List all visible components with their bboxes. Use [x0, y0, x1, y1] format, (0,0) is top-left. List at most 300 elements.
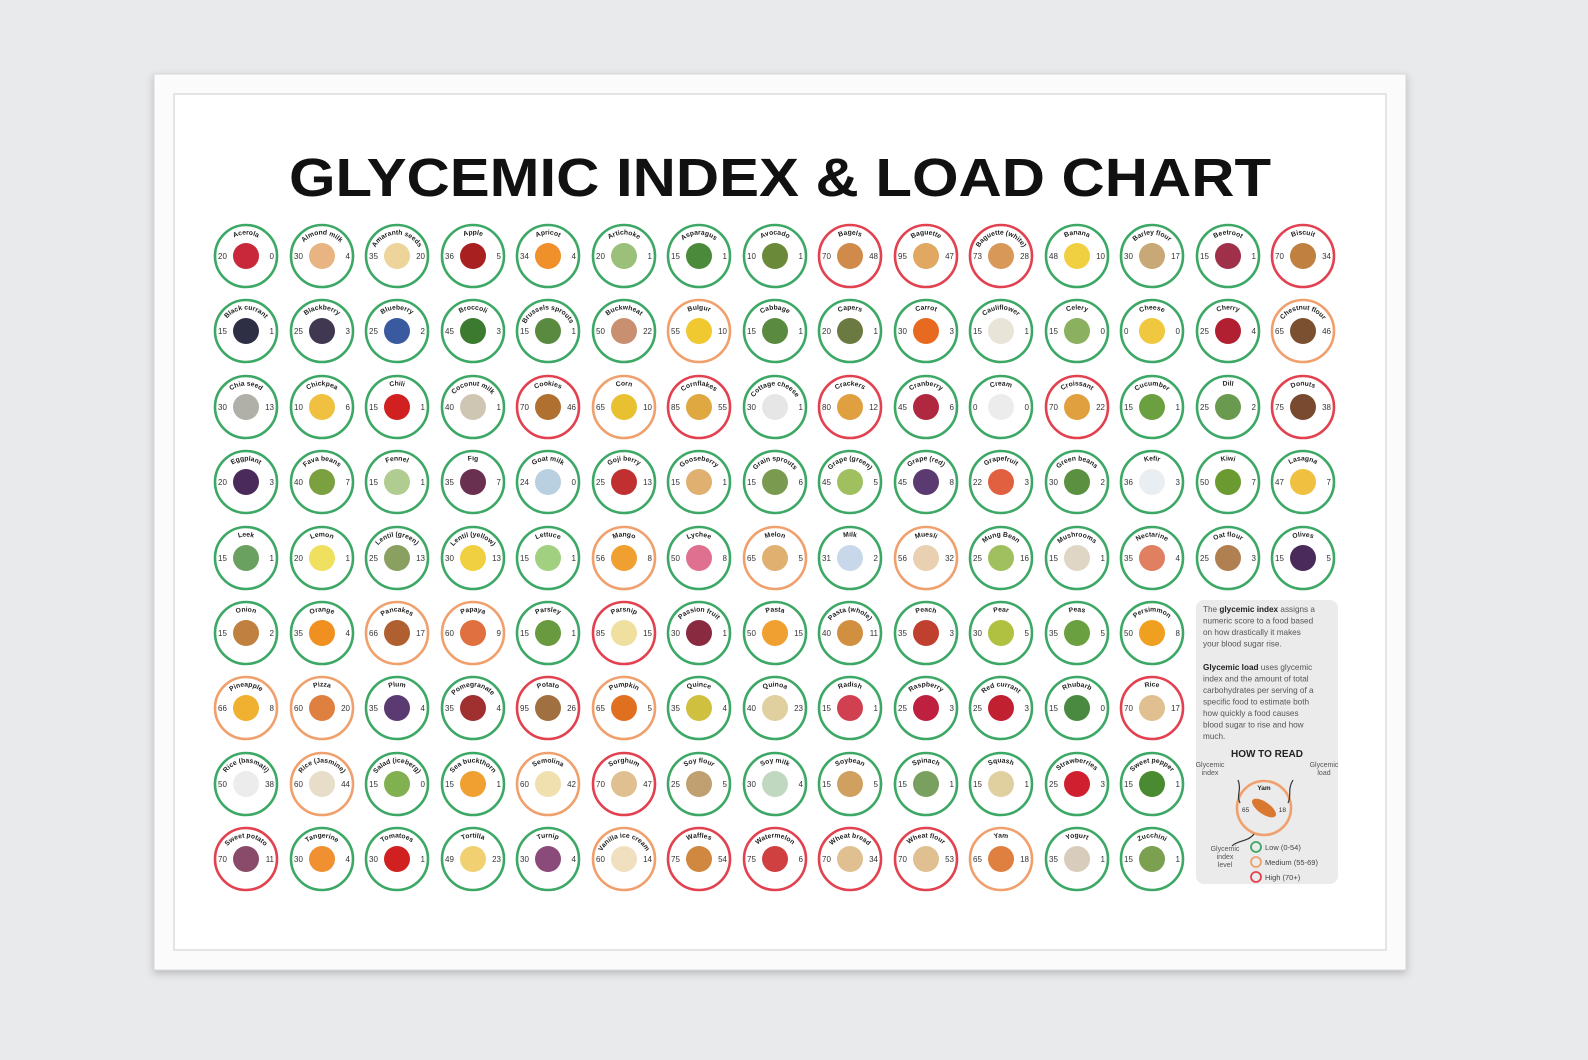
- item: Watermelon: [744, 828, 806, 890]
- item: Peach: [895, 602, 957, 664]
- item: Pumpkin: Pumpkin: [608, 681, 640, 692]
- item: Grapefruit: Grapefruit: [983, 455, 1020, 468]
- item: Chickpea: 6: [346, 403, 351, 412]
- item: Pancakes: [366, 602, 428, 664]
- item: Brussels sprouts: 1: [572, 327, 577, 336]
- item: Papaya: 9: [497, 629, 502, 638]
- item: Turnip: Turnip: [536, 832, 560, 841]
- item: Chia seed: 13: [265, 403, 275, 412]
- item: Amaranth seeds: [364, 224, 430, 288]
- item: Vanilla ice cream: 14: [643, 855, 653, 864]
- item: Biscuit: 70: [1275, 252, 1284, 261]
- item: Corn: 10: [643, 403, 653, 412]
- item: Squash: [970, 753, 1032, 815]
- item: Onion: 15: [218, 629, 227, 638]
- item: Pumpkin: 5: [648, 704, 653, 713]
- item: Mango: [593, 527, 655, 589]
- item: Fennel: 1: [421, 478, 426, 487]
- item: Cranberry: 6: [950, 403, 955, 412]
- item: Cherry: Cherry: [1216, 305, 1240, 312]
- item: Pumpkin: 65: [596, 704, 605, 713]
- item: Banana: Banana: [1064, 230, 1090, 238]
- item: Goat milk: [517, 451, 579, 513]
- item: Amaranth seeds: 35: [369, 252, 378, 261]
- item: Goji berry: Goji berry: [606, 455, 642, 467]
- item: Goji berry: 13: [643, 478, 653, 487]
- item: Cranberry: Cranberry: [909, 380, 943, 390]
- item: Cornflakes: Cornflakes: [681, 380, 717, 391]
- item: Pumpkin: [593, 677, 655, 739]
- item: Quinoa: Quinoa: [762, 681, 789, 691]
- item: Milk: 2: [874, 554, 879, 563]
- item: Barley flour: 30: [1124, 252, 1133, 261]
- item: Turnip: 4: [572, 855, 577, 864]
- item: Wheat flour: 70: [898, 855, 907, 864]
- item: Amaranth seeds: 20: [416, 252, 426, 261]
- item: Rice: [1121, 677, 1183, 739]
- item: Yogurt: 35: [1049, 855, 1058, 864]
- item: Chestnut flour: Chestnut flour: [1280, 306, 1326, 319]
- item: Lasagna: Lasagna: [1288, 455, 1319, 466]
- item: Passion fruit: 1: [723, 629, 728, 638]
- item: Raspberry: 25: [898, 704, 907, 713]
- item: Persimmon: Persimmon: [1132, 606, 1172, 620]
- item: Lychee: Lychee: [686, 531, 712, 541]
- item: Goji berry: 25: [596, 478, 605, 487]
- item: Black currant: 15: [218, 327, 227, 336]
- item: Parsnip: [593, 602, 655, 664]
- item: Tangerine: 30: [294, 855, 303, 864]
- item: Donuts: 38: [1322, 403, 1332, 412]
- item: Sweet pepper: 1: [1176, 780, 1181, 789]
- item: Asparagus: [666, 224, 732, 288]
- item: Apricot: Apricot: [536, 230, 561, 238]
- item: Cottage cheese: [742, 374, 808, 440]
- item: Acerola: Acerola: [234, 230, 259, 238]
- item: Quinoa: [744, 677, 806, 739]
- item: Croissant: [1046, 376, 1108, 438]
- item: Sea buckthorn: 15: [445, 780, 454, 789]
- item: Crackers: 80: [822, 403, 831, 412]
- item: Pizza: Pizza: [312, 681, 332, 690]
- item: Waffles: 54: [718, 855, 728, 864]
- item: Grapefruit: 22: [973, 478, 982, 487]
- item: Bulgur: 10: [718, 327, 728, 336]
- item: Cookies: [516, 374, 580, 440]
- item: Milk: 31: [822, 554, 831, 563]
- item: Carrot: 30: [898, 327, 907, 336]
- item: Quince: 4: [723, 704, 728, 713]
- item: Artichoke: 20: [596, 252, 605, 261]
- legend: glycemic index level: High (70+): [1265, 873, 1301, 882]
- item: Muesli: [895, 527, 957, 589]
- item: Blackberry: Blackberry: [303, 304, 340, 316]
- item: Kefir: 3: [1176, 478, 1181, 487]
- item: Grapefruit: [970, 451, 1032, 513]
- item: Rice (basmati): Rice (basmati): [222, 757, 270, 774]
- item: Green beans: 30: [1049, 478, 1058, 487]
- item: Crackers: 12: [869, 403, 879, 412]
- text block: glycemic index definition: your blood sugar rise.: [1203, 640, 1282, 648]
- item: Bagels: 70: [822, 252, 831, 261]
- item: Tortilla: 23: [492, 855, 502, 864]
- item: Almond milk: 30: [294, 252, 303, 261]
- item: Beetroot: Beetroot: [1212, 230, 1243, 238]
- text block: glycemic load definition: specific food to estimate both: [1203, 698, 1309, 706]
- item: Broccoli: 3: [497, 327, 502, 336]
- item: Papaya: 60: [445, 629, 454, 638]
- item: Chickpea: Chickpea: [306, 380, 338, 390]
- item: Quinoa: 23: [794, 704, 804, 713]
- item: Sweet potato: Sweet potato: [224, 832, 268, 848]
- item: Pomegranate: Pomegranate: [450, 681, 496, 697]
- item: Almond milk: [290, 224, 354, 288]
- item: Oat flour: [1197, 527, 1259, 589]
- item: Persimmon: [1121, 602, 1183, 664]
- text block: glycemic index definition: The glycemic index assigns a: [1203, 605, 1315, 614]
- item: Mung Bean: 16: [1020, 554, 1030, 563]
- item: Zucchini: 1: [1176, 855, 1181, 864]
- item: Baguette: 47: [945, 252, 955, 261]
- diagram: yam example: 65: [1242, 807, 1250, 814]
- item: Rice (Jasmine): Rice (Jasmine): [298, 757, 347, 775]
- item: Bulgur: [666, 298, 732, 364]
- item: Pineapple: [215, 677, 277, 739]
- item: Cherry: [1196, 298, 1260, 364]
- text block: glycemic load definition: Glycemic load uses glycemic: [1203, 663, 1312, 672]
- item: Cranberry: 45: [898, 403, 907, 412]
- item: Donuts: 75: [1275, 403, 1284, 412]
- legend: glycemic index level: Medium (55-69): [1265, 858, 1318, 867]
- item: Pear: 5: [1025, 629, 1030, 638]
- item: Soy milk: 30: [747, 780, 756, 789]
- item: Turnip: [517, 828, 579, 890]
- item: Leek: 1: [270, 554, 275, 563]
- item: Mango: 8: [648, 554, 653, 563]
- item: Grain sprouts: Grain sprouts: [752, 455, 798, 472]
- item: Apricot: 34: [520, 252, 529, 261]
- item: Cucumber: Cucumber: [1134, 380, 1171, 393]
- item: Artichoke: 1: [648, 252, 653, 261]
- item: Soy flour: [668, 753, 730, 815]
- item: Celery: Celery: [1066, 304, 1088, 312]
- item: Carrot: 3: [950, 327, 955, 336]
- item: Potato: 26: [567, 704, 577, 713]
- item: Lentil (green): [366, 527, 428, 589]
- item: Broccoli: [440, 298, 506, 364]
- item: Raspberry: 3: [950, 704, 955, 713]
- item: Nectarine: [1121, 527, 1183, 589]
- item: Cornflakes: 85: [671, 403, 680, 412]
- item: Muesli: 56: [898, 554, 907, 563]
- item: Grape (green): [819, 451, 881, 513]
- item: Plum: [366, 677, 428, 739]
- item: Cabbage: Cabbage: [760, 304, 790, 313]
- item: Sweet pepper: 15: [1124, 780, 1133, 789]
- item: Cottage cheese: 1: [799, 403, 804, 412]
- item: Quince: 35: [671, 704, 680, 713]
- item: Apple: 36: [445, 252, 454, 261]
- item: Parsley: Parsley: [534, 606, 562, 616]
- item: Onion: Onion: [235, 606, 257, 615]
- item: Donuts: [1272, 376, 1334, 438]
- diagram: yam example: 18: [1279, 807, 1286, 814]
- item: Chickpea: [290, 374, 354, 440]
- item: Peach: 35: [898, 629, 907, 638]
- item: Lychee: 50: [671, 554, 680, 563]
- item: Pancakes: Pancakes: [380, 606, 415, 618]
- item: Baguette: 95: [898, 252, 907, 261]
- item: Radish: [819, 677, 881, 739]
- diagram: yam example: index: [1202, 770, 1219, 777]
- item: Pasta (whole): Pasta (whole): [827, 606, 873, 622]
- item: Radish: Radish: [837, 681, 863, 691]
- item: Sweet potato: [215, 828, 277, 890]
- item: Bulgur: Bulgur: [687, 304, 711, 312]
- item: Lentil (green): Lentil (green): [374, 531, 420, 547]
- item: Wheat flour: [895, 828, 957, 890]
- item: Cucumber: [1121, 376, 1183, 438]
- item: Yogurt: Yogurt: [1065, 832, 1090, 842]
- item: Fava beans: Fava beans: [302, 455, 342, 469]
- item: Peas: Peas: [1068, 606, 1086, 615]
- item: Grape (red): 45: [898, 478, 907, 487]
- item: Parsnip: Parsnip: [610, 606, 638, 616]
- diagram: yam example: Glycemic: [1196, 762, 1225, 769]
- item: Spinach: [895, 753, 957, 815]
- item: Dill: Dill: [1222, 380, 1234, 388]
- item: Cucumber: 15: [1124, 403, 1133, 412]
- item: Grape (green): 45: [822, 478, 831, 487]
- item: Black currant: 1: [270, 327, 275, 336]
- item: Cornflakes: [666, 374, 732, 440]
- item: Salad (iceberg): Salad (iceberg): [372, 757, 422, 775]
- item: Beetroot: 15: [1200, 252, 1209, 261]
- item: Crackers: [818, 374, 882, 440]
- item: Salad (iceberg): [366, 753, 428, 815]
- item: Corn: Corn: [616, 381, 632, 387]
- item: Olives: 15: [1275, 554, 1284, 563]
- item: Coconut milk: Coconut milk: [452, 382, 494, 394]
- item: Cottage cheese: Cottage cheese: [751, 382, 798, 397]
- item: Chili: Chili: [390, 380, 405, 386]
- item: Plum: 35: [369, 704, 378, 713]
- item: Spinach: 1: [950, 780, 955, 789]
- item: Rice (Jasmine): [291, 753, 353, 815]
- item: Blueberry: 2: [421, 327, 426, 336]
- item: Zucchini: 15: [1124, 855, 1133, 864]
- item: Nectarine: 4: [1176, 554, 1181, 563]
- item: Radish: 1: [874, 704, 879, 713]
- item: Bagels: [818, 224, 882, 288]
- item: Pineapple: 66: [218, 704, 227, 713]
- item: Peach: 3: [950, 629, 955, 638]
- item: Dill: 2: [1252, 403, 1257, 412]
- item: Chili: 1: [421, 403, 426, 412]
- item: Corn: 65: [596, 403, 605, 412]
- text block: glycemic load definition: carbohydrates per serving of a: [1203, 686, 1314, 695]
- item: Muesli: 32: [945, 554, 955, 563]
- item: Coconut milk: 1: [497, 403, 502, 412]
- item: Capers: 20: [822, 327, 831, 336]
- item: Tortilla: Tortilla: [460, 832, 486, 842]
- item: Raspberry: Raspberry: [908, 681, 945, 694]
- item: Cookies: 46: [567, 403, 577, 412]
- item: Cucumber: 1: [1176, 403, 1181, 412]
- item: Tortilla: [442, 828, 504, 890]
- item: Papaya: Papaya: [460, 606, 487, 616]
- item: Pear: [970, 602, 1032, 664]
- item: Avocado: 10: [747, 252, 756, 261]
- item: Nectarine: Nectarine: [1135, 531, 1169, 543]
- item: Grape (red): 8: [950, 478, 955, 487]
- item: Parsley: [517, 602, 579, 664]
- item: Barley flour: 17: [1171, 252, 1181, 261]
- item: Croissant: Croissant: [1060, 380, 1095, 392]
- item: Cherry: 25: [1200, 327, 1209, 336]
- item: Apricot: 4: [572, 252, 577, 261]
- item: Strawberries: [1046, 753, 1108, 815]
- item: Cherry: 4: [1252, 327, 1257, 336]
- item: Rice (basmati): 50: [218, 780, 227, 789]
- item: Donuts: Donuts: [1290, 380, 1317, 390]
- item: Rice: 70: [1124, 704, 1133, 713]
- item: Quince: [668, 677, 730, 739]
- item: Lasagna: 7: [1327, 478, 1332, 487]
- item: Artichoke: Artichoke: [608, 230, 640, 240]
- item: Fennel: [366, 451, 428, 513]
- item: Black currant: Black currant: [224, 305, 268, 318]
- item: Wheat bread: 70: [822, 855, 831, 864]
- text block: glycemic load definition: index and the amount of total: [1203, 674, 1309, 684]
- item: Carrot: [894, 298, 958, 364]
- item: Chestnut flour: 65: [1275, 327, 1284, 336]
- item: Goji berry: [593, 451, 655, 513]
- item: Soy flour: 5: [723, 780, 728, 789]
- item: Mushrooms: 1: [1101, 554, 1106, 563]
- item: Apricot: [516, 224, 580, 288]
- item: Strawberries: Strawberries: [1055, 757, 1099, 772]
- item: Melon: Melon: [764, 531, 786, 540]
- item: Sea buckthorn: Sea buckthorn: [449, 757, 497, 774]
- item: Blueberry: Blueberry: [380, 304, 414, 314]
- item: Kiwi: 7: [1252, 478, 1257, 487]
- item: Pomegranate: 35: [445, 704, 454, 713]
- item: Yam: 18: [1020, 855, 1030, 864]
- item: Buckwheat: 22: [643, 327, 653, 336]
- item: Pomegranate: 4: [497, 704, 502, 713]
- item: Cookies: 70: [520, 403, 529, 412]
- item: Yam: [970, 828, 1032, 890]
- item: Pasta (whole): [819, 602, 881, 664]
- item: Watermelon: Watermelon: [754, 832, 796, 846]
- item: Zucchini: Zucchini: [1136, 832, 1168, 843]
- item: Rhubarb: 15: [1049, 704, 1058, 713]
- item: Red currant: Red currant: [980, 681, 1022, 696]
- item: Cream: 0: [1025, 403, 1030, 412]
- item: Olives: [1272, 527, 1334, 589]
- item: Dill: [1197, 376, 1259, 438]
- item: Potato: 95: [520, 704, 529, 713]
- text block: glycemic load definition: how quickly a food causes: [1203, 709, 1299, 718]
- item: Barley flour: [1120, 224, 1184, 288]
- item: Pasta: 15: [794, 629, 804, 638]
- item: Kiwi: 50: [1200, 478, 1209, 487]
- frame: [154, 74, 1406, 970]
- item: Bagels: Bagels: [838, 230, 862, 237]
- item: Avocado: 1: [799, 252, 804, 261]
- item: Banana: [1044, 224, 1110, 288]
- item: Gooseberry: [668, 451, 730, 513]
- item: Tortilla: 49: [445, 855, 454, 864]
- item: Wheat flour: Wheat flour: [906, 832, 947, 846]
- item: Fig: 35: [445, 478, 454, 487]
- item: Chili: 15: [369, 403, 378, 412]
- item: Lentil (yellow): Lentil (yellow): [450, 531, 497, 548]
- item: Buckwheat: Buckwheat: [605, 305, 643, 316]
- item: Eggplant: Eggplant: [230, 455, 263, 467]
- item: Croissant: 22: [1096, 403, 1106, 412]
- item: Capers: Capers: [838, 306, 862, 312]
- item: Lychee: [668, 527, 730, 589]
- item: Pasta: [744, 602, 806, 664]
- item: Olives: Olives: [1292, 531, 1315, 540]
- item: Pasta (whole): 11: [870, 629, 879, 638]
- item: Kefir: 36: [1124, 478, 1133, 487]
- item: Soybean: [819, 753, 881, 815]
- item: Dill: 25: [1200, 403, 1209, 412]
- item: Celery: [1044, 298, 1110, 364]
- item: Leek: 15: [218, 554, 227, 563]
- item: Mango: 56: [596, 554, 605, 563]
- item: Yogurt: 1: [1101, 855, 1106, 864]
- item: Celery: 0: [1101, 327, 1106, 336]
- item: Rhubarb: Rhubarb: [1061, 681, 1093, 692]
- item: Gooseberry: 1: [723, 478, 728, 487]
- item: Pizza: [291, 677, 353, 739]
- item: Banana: 48: [1049, 252, 1058, 261]
- item: Black currant: [214, 298, 278, 364]
- item: Grape (red): [895, 451, 957, 513]
- item: Fennel: 15: [369, 478, 378, 487]
- item: Passion fruit: Passion fruit: [677, 606, 721, 622]
- item: Sea buckthorn: [442, 753, 504, 815]
- item: Carrot: Carrot: [916, 306, 938, 312]
- item: Coconut milk: 40: [445, 403, 454, 412]
- item: Baguette (white): Baguette (white): [976, 230, 1026, 248]
- item: Milk: [819, 527, 881, 589]
- item: Lentil (yellow): [442, 527, 504, 589]
- item: Yam: 65: [973, 855, 982, 864]
- item: Melon: 65: [747, 554, 756, 563]
- item: Baguette: [894, 224, 958, 288]
- item: Grape (green): Grape (green): [827, 455, 873, 471]
- text block: glycemic load definition: blood sugar to rise and how: [1203, 720, 1304, 730]
- item: Fig: 7: [497, 478, 502, 487]
- item: Soy milk: Soy milk: [759, 757, 791, 768]
- item: Kefir: Kefir: [1143, 455, 1161, 464]
- item: Waffles: Waffles: [686, 832, 713, 842]
- item: Artichoke: [592, 224, 656, 288]
- item: Spinach: Spinach: [911, 757, 941, 768]
- item: Orange: 4: [346, 629, 351, 638]
- item: Acerola: 0: [270, 252, 275, 261]
- legend: glycemic index level: level: [1218, 862, 1233, 869]
- text block: glycemic index definition: numeric score to a food based: [1203, 616, 1314, 626]
- item: Fig: [442, 451, 504, 513]
- item: Potato: [517, 677, 579, 739]
- item: Lemon: 20: [294, 554, 303, 563]
